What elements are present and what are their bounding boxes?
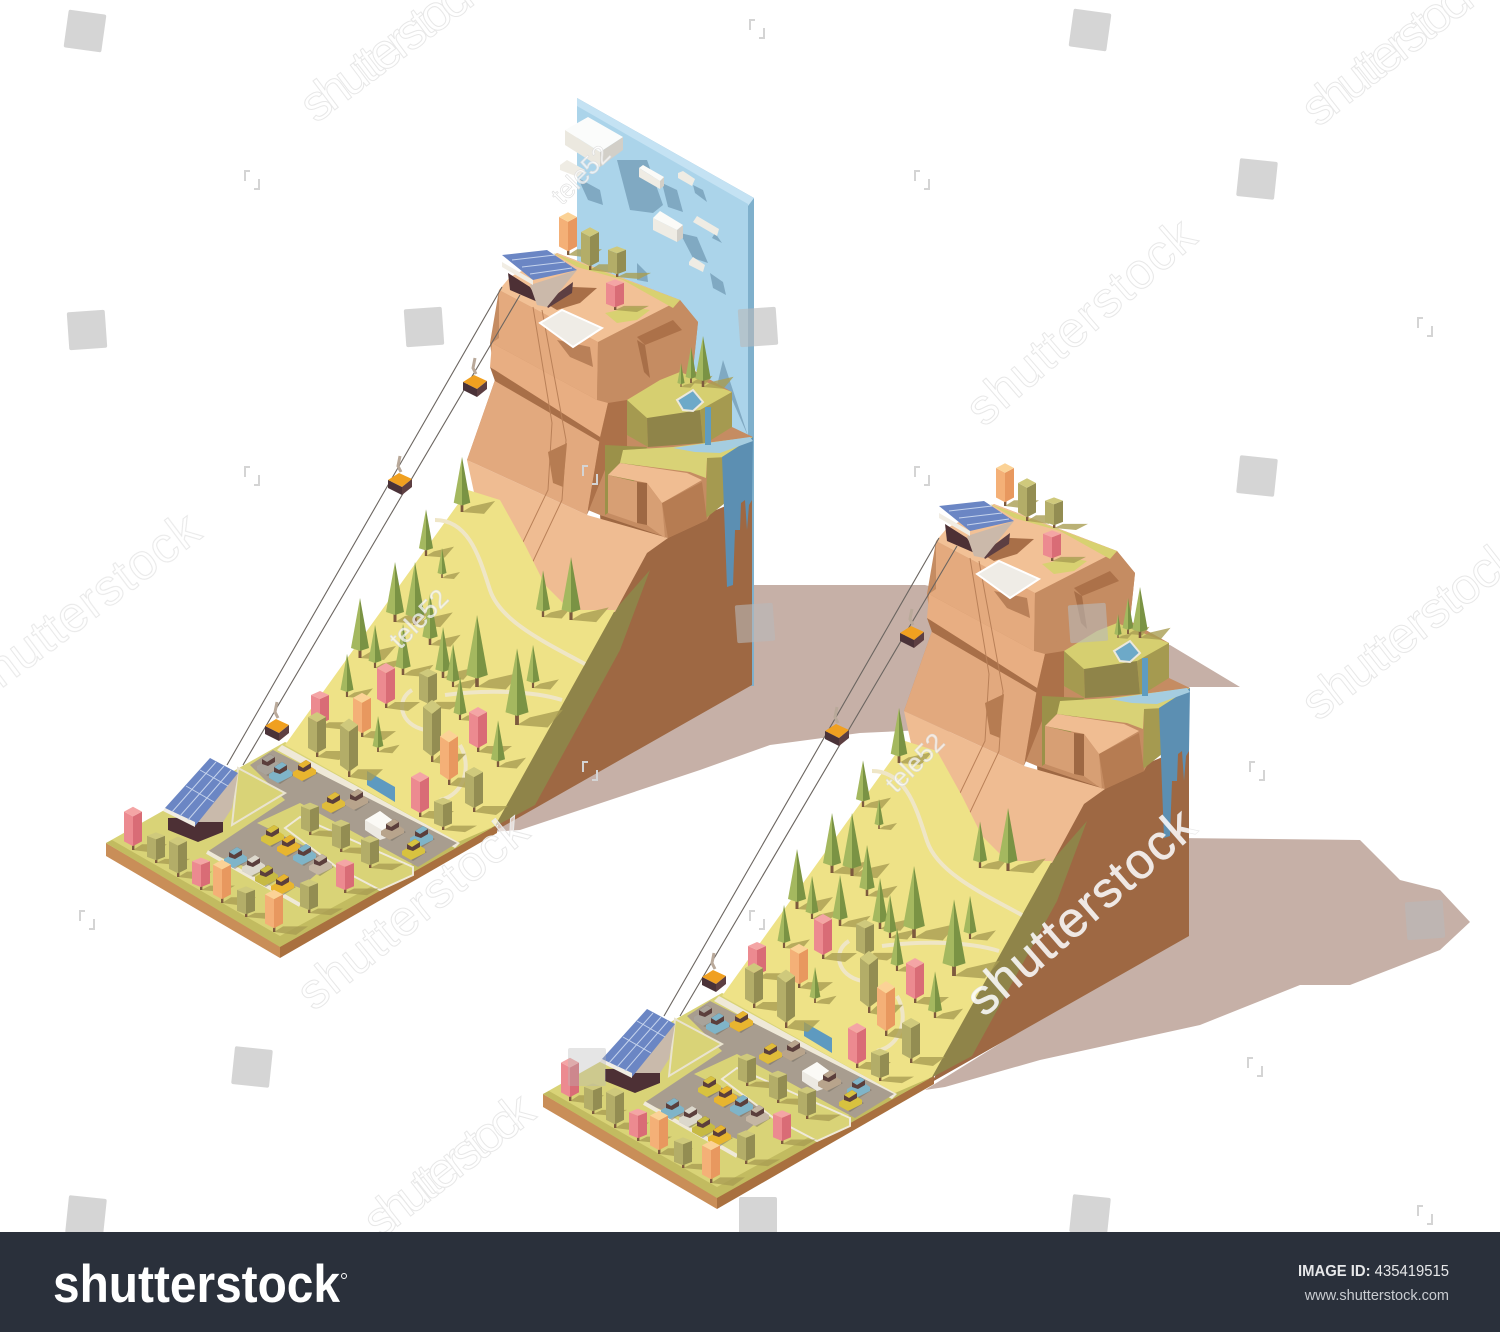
cliff rock patch	[548, 443, 567, 487]
watermark: text on right slope: shutterstock	[954, 796, 1207, 1026]
registered mark	[342, 1274, 346, 1278]
cloud shadows	[578, 160, 748, 436]
watermark: contributor text: tele52	[879, 727, 950, 798]
gondolas	[265, 358, 487, 741]
plateau shadow	[545, 287, 597, 310]
watermark: contributor text	[383, 139, 950, 798]
cliff right faces	[597, 300, 698, 400]
grass patch	[605, 307, 650, 323]
olive slope side	[492, 570, 650, 828]
truck	[365, 811, 406, 841]
ground slab	[106, 742, 497, 958]
peach lower slope	[467, 460, 668, 612]
cliff second band	[490, 343, 608, 437]
watermark: contributor text: tele52	[383, 583, 454, 654]
watermark: repeated text: shutterstock	[352, 1081, 545, 1249]
panel: sky backdrop	[560, 98, 754, 686]
pond	[677, 390, 703, 411]
lower cliff	[467, 380, 600, 515]
plateau	[499, 253, 680, 342]
trails	[402, 520, 585, 800]
shadow: left model	[490, 585, 1240, 832]
shadow: right model	[925, 838, 1470, 1090]
top cliff front	[492, 290, 598, 400]
slope and yard trees	[124, 457, 609, 935]
billboard	[367, 771, 395, 802]
image id: IMAGE ID: 435419515	[1298, 1263, 1449, 1280]
watermark: repeated text: shutterstock	[954, 206, 1207, 436]
helipad platform	[540, 310, 602, 347]
lower grass ledge	[605, 437, 753, 518]
mountain model: right	[543, 463, 1190, 1209]
mountain model: left	[106, 212, 753, 958]
lower cable station	[163, 758, 238, 842]
cliff band shadow	[490, 367, 600, 442]
footer logo: shutterstock	[53, 1255, 340, 1314]
footer bar	[0, 1232, 1500, 1332]
waterfall	[673, 407, 753, 587]
grass: plateau edge	[553, 253, 680, 308]
website: www.shutterstock.com	[1304, 1288, 1449, 1304]
cables	[227, 287, 520, 765]
rock outcrop	[608, 463, 707, 538]
upper cable station	[502, 250, 577, 308]
cliff underlay	[467, 253, 753, 538]
clouds	[560, 117, 719, 272]
parking lots and roads	[207, 745, 460, 905]
rock steps	[637, 320, 682, 345]
cliff cracks and route	[430, 307, 566, 780]
vehicles	[224, 754, 435, 896]
watermark: contributor text: tele52	[545, 139, 616, 210]
watermark: repeated text: shutterstock	[286, 800, 539, 1021]
yellow slope	[285, 490, 615, 842]
brown side wall	[495, 495, 752, 831]
summit trees	[559, 212, 734, 389]
helipad shadow	[557, 340, 593, 367]
upper grass ledge	[627, 372, 732, 447]
